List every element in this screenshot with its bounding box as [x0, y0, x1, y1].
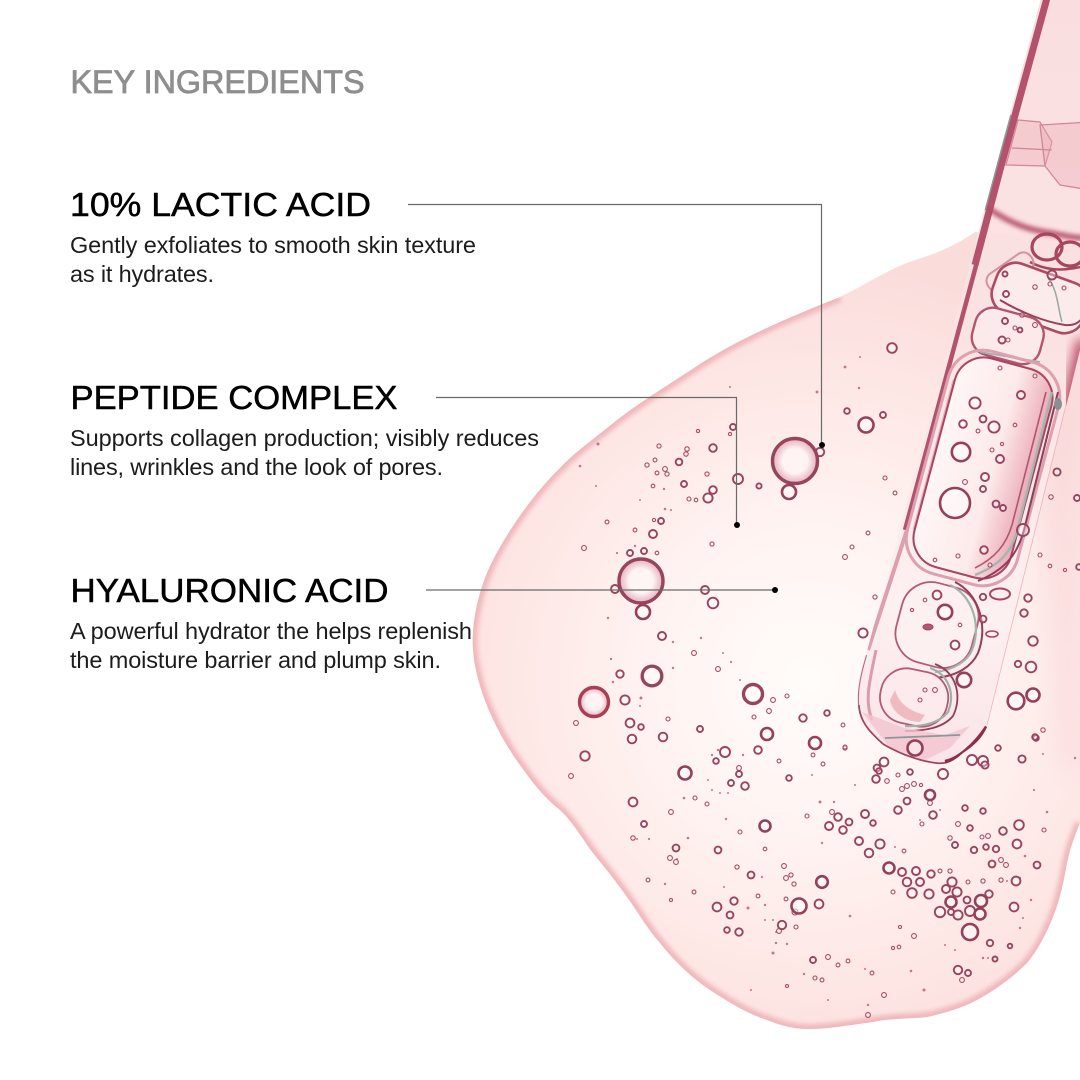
icon: rubber seal shape inside tube: [1006, 120, 1080, 190]
icon: dropper tip: [862, 712, 970, 760]
icon: large capsule: [912, 356, 1054, 580]
icon: small pink ellipses in dropper: [923, 398, 1062, 637]
block: lactic acid: [70, 187, 476, 287]
title: KEY INGREDIENTS: [70, 64, 364, 100]
description: A powerful hydrator the helps replenish: [70, 618, 472, 644]
description: the moisture barrier and plump skin.: [70, 647, 441, 673]
description: lines, wrinkles and the look of pores.: [70, 454, 443, 480]
panel: serum puddle: [473, 232, 1080, 1029]
callout line: hyaluronic acid: [426, 587, 778, 593]
heading: 10% LACTIC ACID: [70, 187, 371, 224]
description: Supports collagen production; visibly reduces: [70, 425, 539, 451]
chart: medium bubbles: [580, 343, 1080, 976]
chart: small tiny specks in puddle: [579, 356, 1076, 1006]
callout line: lactic acid: [408, 204, 825, 448]
icon: lower blob: [879, 667, 950, 728]
icon: tube wall shadow: [975, 0, 1047, 265]
icon: top dark neck of bubbles: [988, 208, 1080, 238]
chart: large bubbles: [636, 418, 1040, 940]
icon: round blob: [894, 581, 980, 669]
chart: bubbles inside dropper: [908, 270, 1067, 756]
icon: upper capsule: [990, 261, 1080, 335]
description: Gently exfoliates to smooth skin texture: [70, 232, 476, 258]
callout line: peptide complex: [436, 398, 740, 528]
description: as it hydrates.: [70, 261, 214, 287]
heading: PEPTIDE COMPLEX: [70, 380, 398, 417]
block: peptide complex: [70, 380, 539, 480]
chart: small bubbles: [569, 429, 1053, 1017]
panel: glass dropper: [858, 0, 1080, 764]
heading: HYALURONIC ACID: [70, 573, 388, 610]
chart: biggest bubbles: [580, 438, 818, 716]
block: hyaluronic acid: [70, 573, 472, 673]
